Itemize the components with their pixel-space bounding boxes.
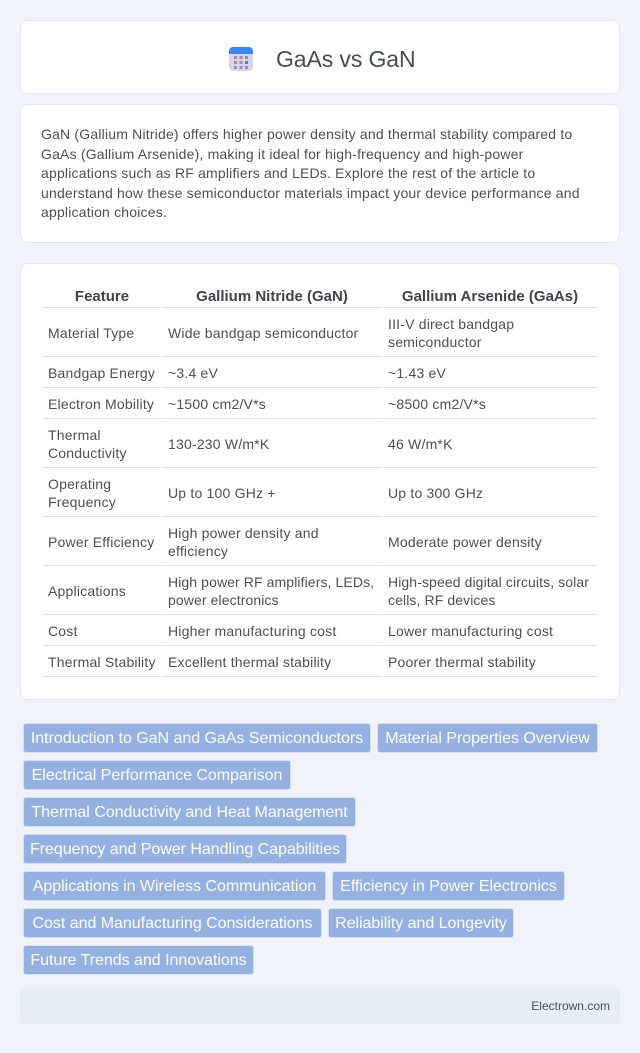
comparison table: High power RF amplifiers, LEDs, [168, 574, 374, 590]
comparison table: cells, RF devices [388, 592, 496, 608]
comparison table: Up to 100 GHz + [168, 485, 276, 501]
comparison table: ~8500 cm2/V*s [388, 396, 486, 412]
comparison table: Higher manufacturing cost [168, 623, 336, 639]
text block: intro: GaN (Gallium Nitride) offers higher power density and thermal stability compared to [41, 126, 572, 142]
comparison table: Gallium Arsenide (GaAs) [402, 288, 578, 305]
comparison table: ~1.43 eV [388, 365, 446, 381]
comparison table: 130-230 W/m*K [168, 436, 269, 452]
comparison table: Conductivity [48, 445, 127, 461]
comparison table: High-speed digital circuits, solar [388, 574, 589, 590]
section tags: Electrical Performance Comparison [32, 767, 282, 784]
comparison table: efficiency [168, 543, 228, 559]
comparison table: Gallium Nitride (GaN) [196, 288, 348, 305]
comparison table: Moderate power density [388, 534, 542, 550]
text block: intro: understand how these semiconductor materials impact your device performance and [41, 185, 580, 201]
section tags: Cost and Manufacturing Considerations [33, 915, 312, 932]
comparison table: semiconductor [388, 334, 482, 350]
panel: title header [20, 20, 620, 94]
comparison table: Feature [75, 288, 129, 305]
comparison table: Thermal Stability [48, 654, 156, 670]
comparison table: Electron Mobility [48, 396, 154, 412]
text block: intro: application choices. [41, 204, 167, 220]
comparison table: III-V direct bandgap [388, 316, 514, 332]
comparison table: Bandgap Energy [48, 365, 155, 381]
comparison table: Up to 300 GHz [388, 485, 483, 501]
comparison table: ~1500 cm2/V*s [168, 396, 266, 412]
section tags: Introduction to GaN and GaAs Semiconductors [31, 730, 363, 747]
comparison table: High power density and [168, 525, 319, 541]
comparison table: Excellent thermal stability [168, 654, 331, 670]
comparison table [43, 288, 597, 677]
comparison table: Frequency [48, 494, 116, 510]
panel: comparison table [20, 263, 620, 700]
section tags: Efficiency in Power Electronics [340, 878, 557, 895]
section tags [23, 723, 598, 975]
title: GaAs vs GaN [276, 46, 416, 72]
comparison table: Lower manufacturing cost [388, 623, 553, 639]
comparison table: ~3.4 eV [168, 365, 218, 381]
comparison table: Material Type [48, 325, 134, 341]
section tags: Material Properties Overview [385, 730, 590, 747]
panel: introduction text [20, 104, 620, 243]
comparison table: 46 W/m*K [388, 436, 453, 452]
comparison table: Poorer thermal stability [388, 654, 536, 670]
comparison table: power electronics [168, 592, 279, 608]
comparison table: Thermal [48, 427, 101, 443]
comparison table: Applications [48, 583, 126, 599]
text block: intro [41, 126, 580, 220]
text block: intro: applications such as RF amplifiers and LEDs. Explore the rest of the article to [41, 165, 535, 181]
section tags: Applications in Wireless Communication [33, 878, 316, 895]
comparison table: Cost [48, 623, 78, 639]
section tags: Reliability and Longevity [335, 915, 507, 932]
text block: intro: GaAs (Gallium Arsenide), making it ideal for high-frequency and high-power [41, 146, 524, 162]
comparison table: Wide bandgap semiconductor [168, 325, 358, 341]
icon: calendar grid [229, 47, 253, 71]
footer credit: Electrown.com [531, 999, 610, 1013]
section tags: Thermal Conductivity and Heat Management [31, 804, 348, 821]
section tags: Frequency and Power Handling Capabilities [30, 841, 340, 858]
footer [20, 989, 620, 1023]
comparison table: Operating [48, 476, 111, 492]
comparison table: Power Efficiency [48, 534, 154, 550]
section tags: Future Trends and Innovations [30, 952, 247, 969]
